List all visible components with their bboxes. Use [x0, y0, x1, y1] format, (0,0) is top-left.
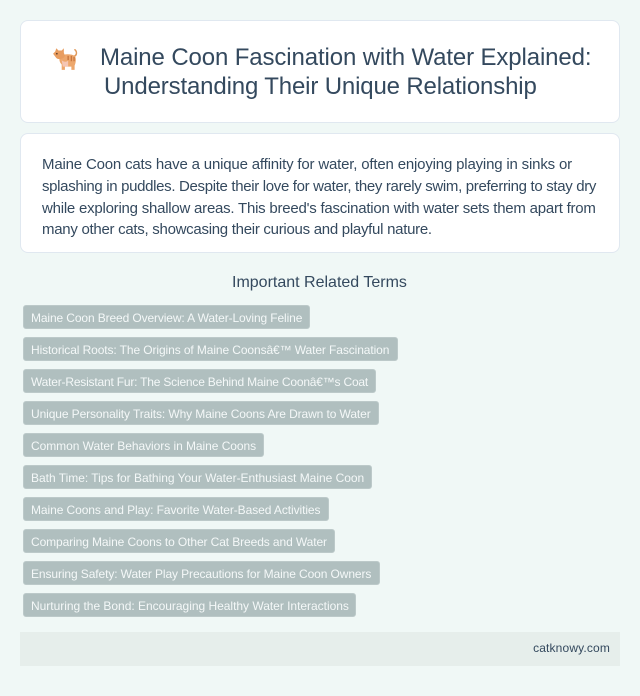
tag 3: [23, 369, 376, 393]
heading: title: [100, 44, 591, 100]
tag 8: [23, 529, 335, 553]
tag 4: Unique Personality Traits: Why Maine Coons Are Drawn to Water: [31, 407, 371, 421]
tag 5: [23, 433, 264, 457]
tag 3: Water-Resistant Fur: The Science Behind Maine Coonâ€™s Coat: [31, 375, 368, 389]
tag 10: Nurturing the Bond: Encouraging Healthy Water Interactions: [31, 599, 349, 613]
title line 2: Understanding Their Unique Relationship: [104, 73, 537, 100]
heading: related terms: Important Related Terms: [232, 274, 407, 291]
footer: site name: catknowy.com: [533, 641, 610, 655]
summary line 2: splashing in puddles. Despite their love for water, they rarely swim, preferring to stay dry: [42, 178, 596, 195]
summary line 3: while exploring shallow areas. This breed's fascination with water sets them apart from: [42, 200, 596, 217]
tag 6: Bath Time: Tips for Bathing Your Water-Enthusiast Maine Coon: [31, 471, 364, 485]
summary line 4: many other cats, showcasing their curious and playful nature.: [42, 221, 432, 238]
title line 1: Maine Coon Fascination with Water Explained:: [100, 44, 591, 71]
panel: summary text: [20, 133, 620, 253]
footer bar: [20, 632, 620, 666]
tag 7: Maine Coons and Play: Favorite Water-Based Activities: [31, 503, 320, 517]
tag 2: Historical Roots: The Origins of Maine Coonsâ€™ Water Fascination: [31, 343, 389, 357]
tag 4: [23, 401, 379, 425]
tag 1: [23, 305, 310, 329]
tag 8: Comparing Maine Coons to Other Cat Breeds and Water: [31, 535, 327, 549]
tag 9: Ensuring Safety: Water Play Precautions for Maine Coon Owners: [31, 567, 371, 581]
tag 7: [23, 497, 329, 521]
tag 2: [23, 337, 398, 361]
tag 9: [23, 561, 380, 585]
tag 6: [23, 465, 372, 489]
list: related term tags: [23, 305, 398, 617]
tag 10: [23, 593, 356, 617]
tag 5: Common Water Behaviors in Maine Coons: [31, 439, 256, 453]
icon: cat: [53, 48, 78, 70]
tag 1: Maine Coon Breed Overview: A Water-Loving Feline: [31, 311, 302, 325]
summary line 1: Maine Coon cats have a unique affinity for water, often enjoying playing in sinks or: [42, 156, 572, 173]
panel: title card: [20, 20, 620, 123]
